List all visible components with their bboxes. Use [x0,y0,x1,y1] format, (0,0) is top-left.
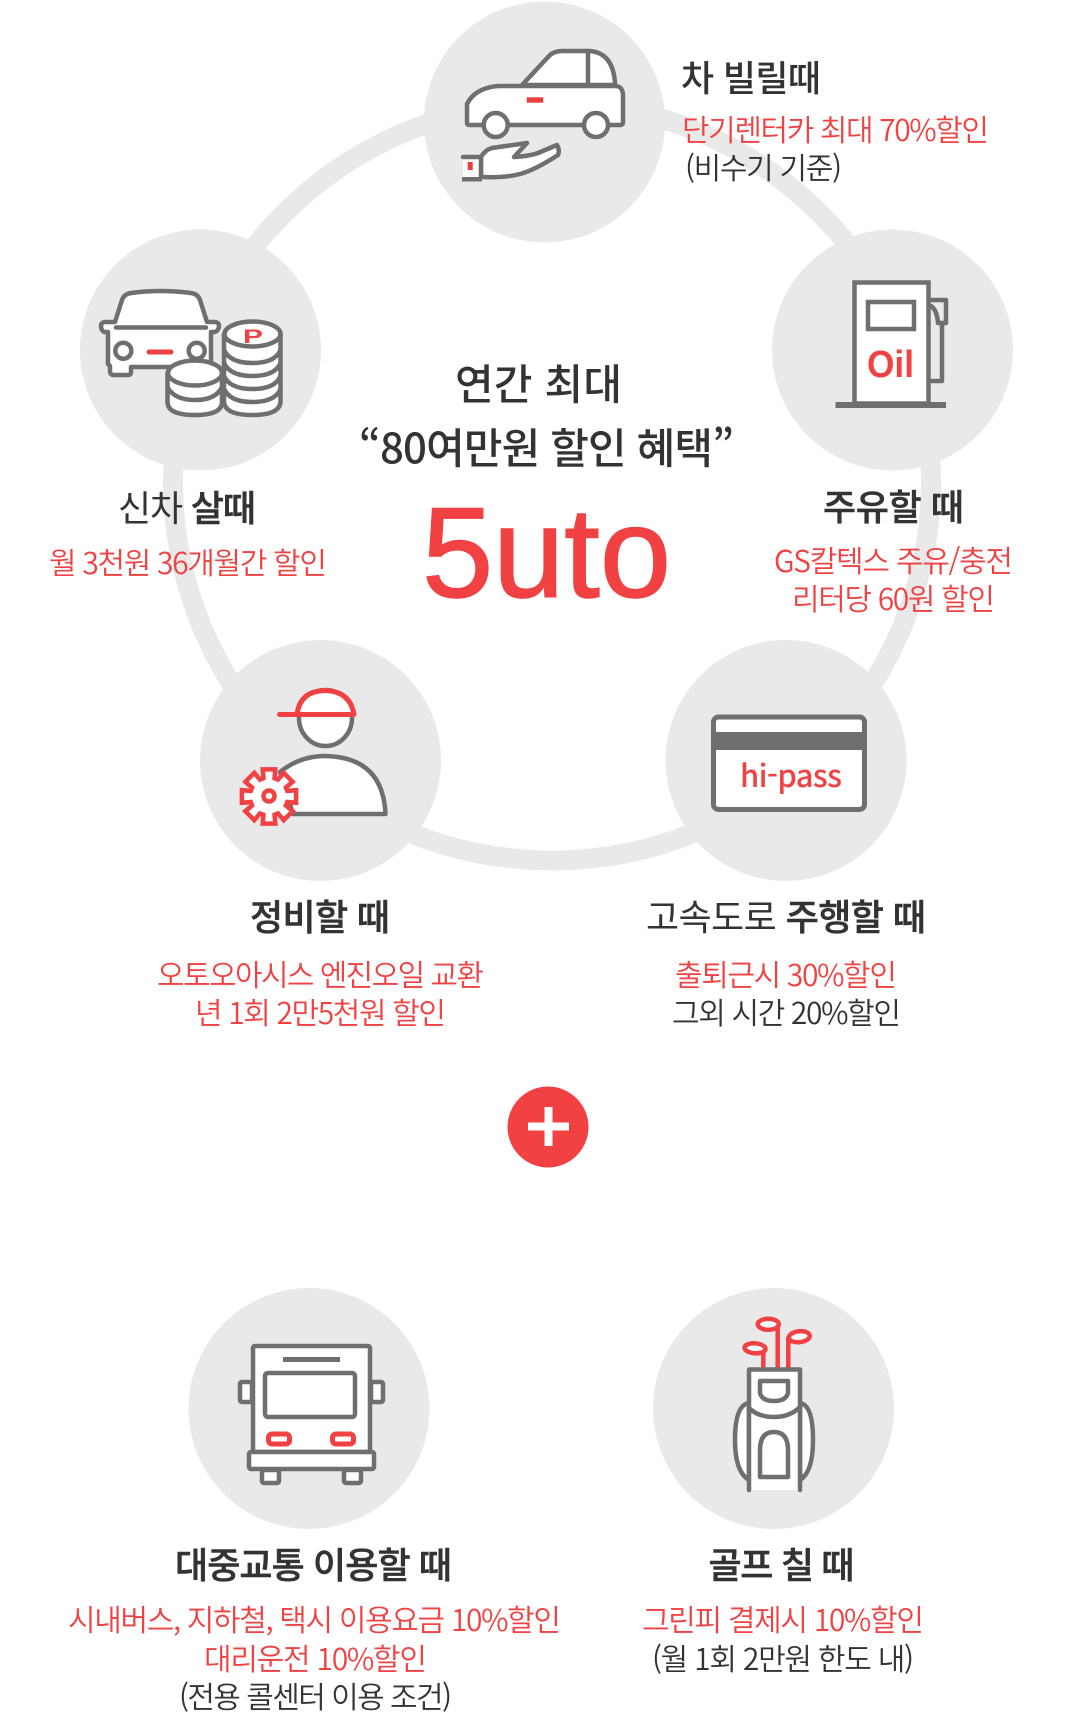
panel: highway [646,640,926,1033]
text: other hours discount: 그외 시간 20%할인 [672,989,901,1033]
ring connecting benefits [173,102,931,860]
text: monthly limit note: (월 1회 2만원 한도 내) [652,1635,914,1679]
text: new car discount: 월 3천원 36개월간 할인 [49,539,327,583]
panel: buying a new car [49,230,327,583]
text: off-peak note: (비수기 기준) [685,144,842,188]
icon circle: highway [666,640,906,881]
icon circle: maintenance [200,640,441,881]
text: green fee discount: 그린피 결제시 10%할인 [642,1596,924,1640]
icon: bus [240,1346,383,1483]
text: fuel discount line 2: 리터당 60원 할인 [792,575,995,619]
text: transit discount: 시내버스, 지하철, 택시 이용요금 10%할인 [68,1596,561,1640]
panel: public transport [68,1288,561,1717]
icon circle: refuelling [772,230,1013,470]
icon: car and coins [101,291,280,415]
text: maintenance line 1: 오토오아시스 엔진오일 교환 [157,951,484,995]
icon: hi-pass card: hi-pass [740,751,842,796]
heading: highway: 고속도로 주행할 때 [646,889,926,941]
panel: rent a car [424,2,989,242]
panel: maintenance [157,640,484,1033]
panel: refuelling [772,230,1013,619]
icon circle: golf [653,1288,894,1529]
icon: car on hand [462,51,623,182]
brand wordmark: 5uto [422,482,671,625]
heading: golf: 골프 칠 때 [708,1537,854,1589]
heading: buying a new car: 신차 살때 [118,480,256,532]
icon: plus badge [508,1086,588,1168]
icon: car and coins: P [243,327,263,348]
icon: fuel pump: Oil [867,344,914,386]
heading: maintenance: 정비할 때 [250,889,390,941]
heading: refuelling: 주유할 때 [823,479,964,531]
text: fuel discount line 1: GS칼텍스 주유/충전 [774,537,1013,581]
icon: hi-pass card [713,717,865,810]
text: rental discount: 단기렌터카 최대 70%할인 [682,106,989,150]
icon: golf bag [735,1319,813,1490]
heading: rent a car: 차 빌릴때 [681,50,821,102]
icon circle: public transport [188,1288,430,1529]
icon circle: new car [80,230,321,470]
panel: golf [642,1288,924,1679]
headline line 1: 연간 최대 [455,352,622,412]
text: designated driver discount: 대리운전 10%할인 [204,1635,427,1679]
heading: public transport: 대중교통 이용할 때 [175,1537,452,1589]
text: commute discount: 출퇴근시 30%할인 [675,951,897,995]
text: maintenance line 2: 년 1회 2만5천원 할인 [195,989,446,1033]
text: call centre note: (전용 콜센터 이용 조건) [179,1673,452,1717]
icon: mechanic [242,690,386,824]
icon: fuel pump [836,282,946,408]
panel: central headline [359,352,734,625]
headline line 2: “80여만원 할인 혜택” [359,416,734,476]
icon circle: rent a car [424,2,665,242]
